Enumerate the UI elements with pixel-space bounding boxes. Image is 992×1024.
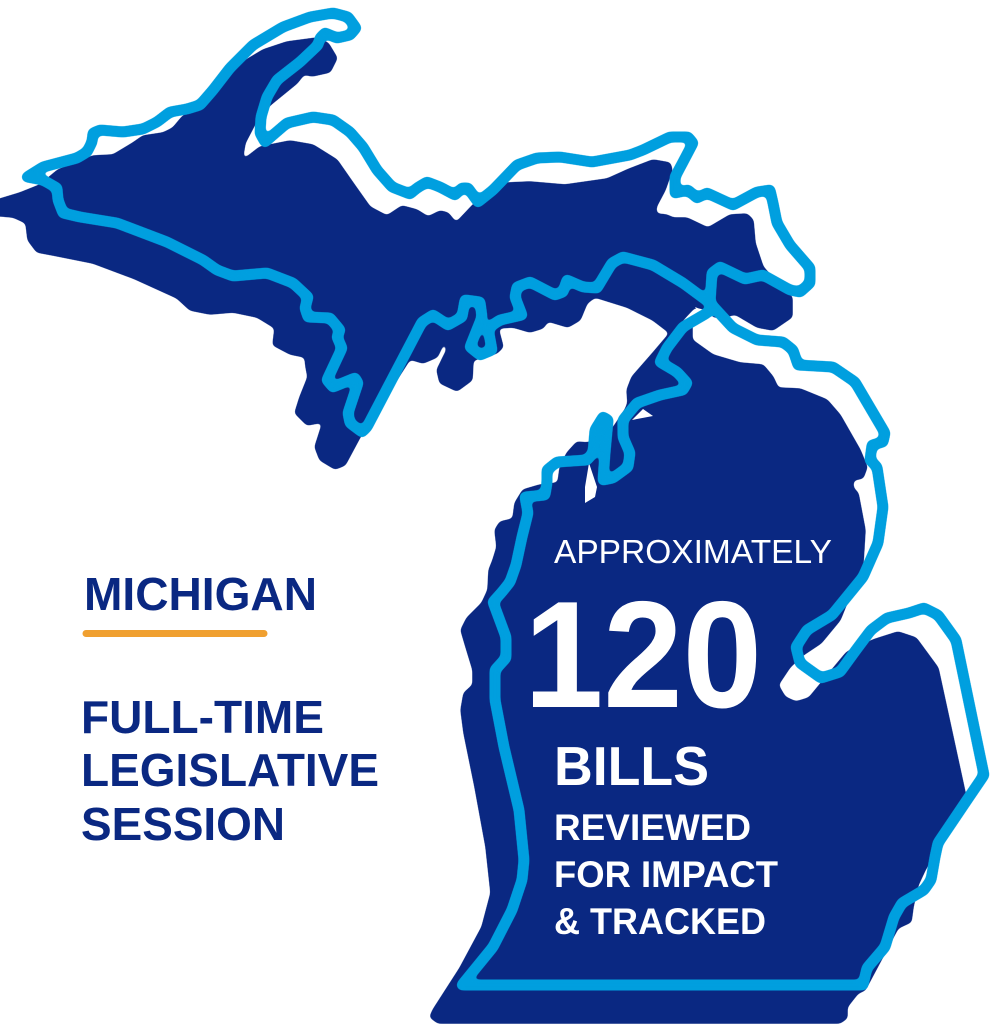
subheading: full-time legislative session: LEGISLATIVE [81, 744, 379, 796]
description: REVIEWED [554, 807, 751, 848]
big number: 120: 120 [524, 570, 762, 740]
stat text on lower peninsula [524, 533, 832, 942]
label: bills: BILLS [554, 735, 709, 797]
upper peninsula outline [27, 13, 810, 432]
orange divider [86, 630, 264, 637]
lower peninsula [430, 320, 966, 1023]
white gaps inside the map [585, 307, 705, 503]
subheading: full-time legislative session [81, 691, 379, 850]
description: & TRACKED [554, 901, 766, 942]
subheading: full-time legislative session: SESSION [81, 798, 285, 850]
lower peninsula outline [462, 303, 984, 985]
description: FOR IMPACT [554, 854, 778, 895]
label: approximately: APPROXIMATELY [554, 533, 832, 570]
upper peninsula [0, 38, 792, 469]
left caption: state name [81, 568, 379, 850]
subheading: full-time legislative session: FULL-TIME [81, 691, 324, 743]
description [554, 807, 778, 942]
heading: MICHIGAN: MICHIGAN [84, 568, 317, 620]
